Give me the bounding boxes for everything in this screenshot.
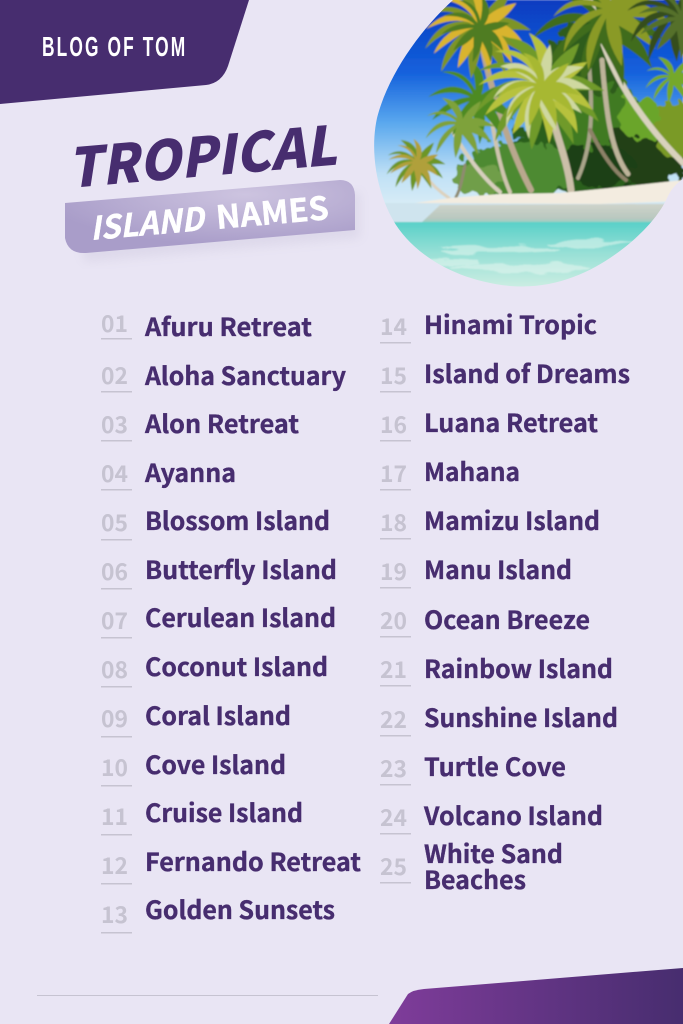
- row 23: 23: [380, 750, 407, 784]
- reflection band: [386, 204, 440, 222]
- water: [394, 221, 652, 286]
- row 17: 17: [380, 455, 407, 489]
- row 18: 18: [380, 504, 407, 538]
- palm trunks: [425, 0, 683, 198]
- row 12: Fernando Retreat: [145, 843, 361, 879]
- row 10: 10: [101, 749, 128, 783]
- row 05: Blossom Island: [145, 502, 330, 538]
- row 25: [380, 835, 563, 897]
- title word: tropical: TROPICAL: [64, 102, 339, 204]
- row 16: Luana Retreat: [424, 404, 598, 440]
- row 21: Rainbow Island: [424, 650, 613, 686]
- subtitle: ISLAND: [88, 194, 209, 250]
- row 11: 11: [101, 798, 128, 832]
- row 12: 12: [101, 847, 128, 881]
- row 20: Ocean Breeze: [424, 601, 590, 637]
- footer tab: [389, 968, 683, 1024]
- row 10: Cove Island: [145, 746, 286, 782]
- row 11: [101, 794, 303, 836]
- subtitle: NAMES: [214, 183, 330, 239]
- title: [64, 102, 360, 262]
- row 25: Beaches: [424, 861, 526, 897]
- sand: [415, 180, 683, 204]
- row 25: 25: [380, 848, 407, 882]
- row 01: 01: [101, 305, 128, 339]
- header tab: [0, 0, 249, 104]
- row 09: Coral Island: [145, 697, 291, 733]
- row 25: White Sand: [424, 835, 563, 871]
- row 04: [101, 454, 236, 490]
- jungle: [454, 20, 683, 198]
- row 01: Afuru Retreat: [144, 308, 312, 344]
- row 08: Coconut Island: [145, 648, 328, 684]
- palm crowns: [534, 0, 663, 86]
- row 09: 09: [101, 700, 128, 734]
- row 09: [101, 697, 291, 738]
- row 14: 14: [380, 308, 407, 342]
- row 14: Hinami Tropic: [424, 306, 597, 342]
- row 21: 21: [380, 651, 407, 685]
- row 11: Cruise Island: [145, 794, 303, 830]
- subtitle: [88, 183, 330, 250]
- banner shadow: [72, 192, 360, 262]
- row 15: 15: [380, 357, 407, 391]
- names list: right column: [380, 306, 630, 897]
- row 20: 20: [380, 602, 407, 636]
- row 13: [101, 891, 335, 934]
- row 17: Mahana: [424, 453, 520, 489]
- row 06: 06: [101, 553, 128, 587]
- row 24: Volcano Island: [423, 797, 603, 833]
- row 22: 22: [380, 701, 407, 735]
- row 17: [380, 453, 520, 490]
- row 05: 05: [101, 504, 128, 538]
- row 06: Butterfly Island: [145, 551, 337, 587]
- brand name: BLOG OF TOM: [42, 31, 185, 62]
- row 16: 16: [380, 406, 407, 440]
- row 22: Sunshine Island: [424, 699, 618, 735]
- row 19: 19: [380, 553, 407, 587]
- row 13: 13: [101, 896, 128, 930]
- row 19: Manu Island: [424, 551, 572, 587]
- row 04: Ayanna: [144, 454, 236, 490]
- row 24: 24: [380, 799, 407, 833]
- row 03: Alon Retreat: [144, 405, 299, 441]
- row 15: Island of Dreams: [424, 355, 630, 391]
- row 07: Cerulean Island: [145, 599, 336, 635]
- row 03: 03: [101, 406, 128, 440]
- row 07: 07: [101, 602, 128, 636]
- subtitle banner: [65, 180, 355, 253]
- row 02: Aloha Sanctuary: [144, 357, 347, 393]
- row 13: Golden Sunsets: [145, 891, 335, 927]
- photo: tropical beach with palm trees: [370, 0, 683, 292]
- row 23: Turtle Cove: [424, 748, 566, 784]
- names list: left column: [101, 305, 361, 934]
- row 18: Mamizu Island: [424, 502, 600, 538]
- row 10: [101, 746, 286, 786]
- row 04: 04: [101, 455, 128, 489]
- row 08: 08: [101, 651, 128, 685]
- row 02: 02: [101, 357, 128, 391]
